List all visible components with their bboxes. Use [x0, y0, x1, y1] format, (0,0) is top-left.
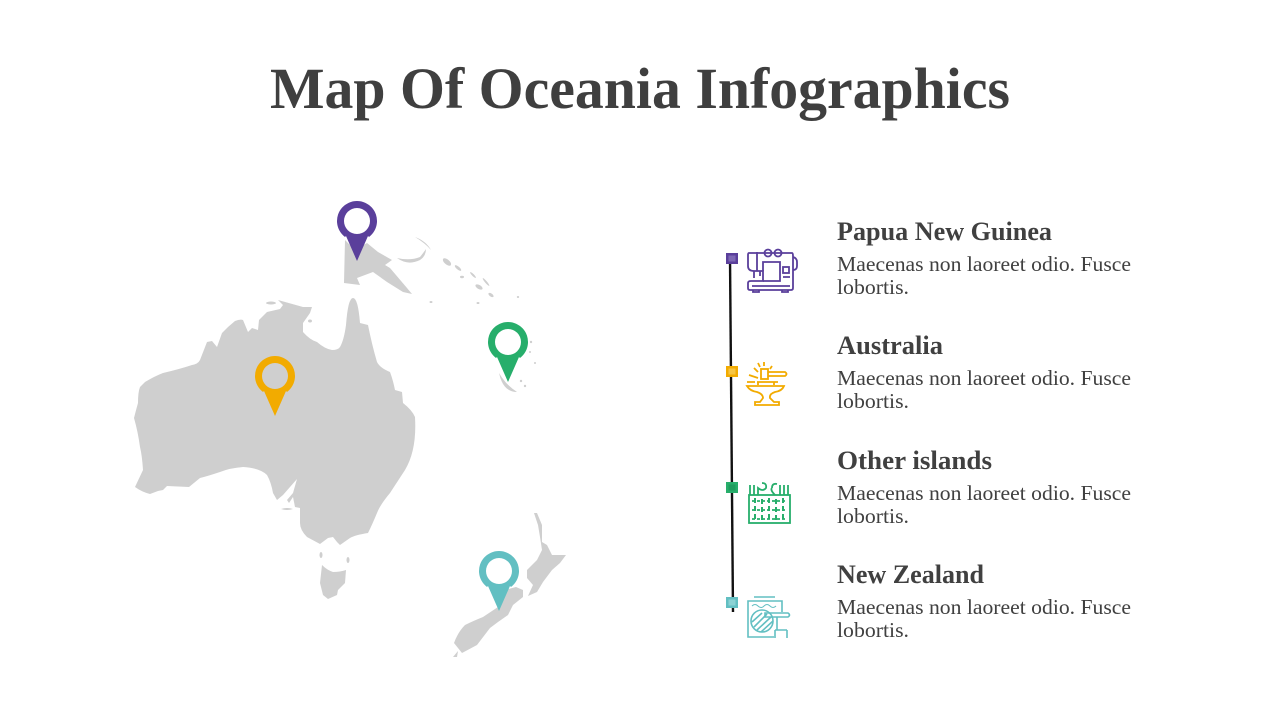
map: Solomon Islands and small islands [430, 257, 519, 304]
map: Kangaroo Island [281, 508, 293, 510]
description: Maecenas non laoreet odio. Fusce [837, 595, 1131, 619]
description: lobortis. [837, 504, 909, 528]
description: lobortis. [837, 275, 909, 299]
map: Tasmania [320, 565, 346, 599]
timeline marker: New Zealand [726, 597, 738, 608]
description: Maecenas non laoreet odio. Fusce [837, 252, 1131, 276]
heading: Australia [837, 331, 943, 360]
map: northern Australian islands [266, 302, 312, 322]
description: Maecenas non laoreet odio. Fusce [837, 481, 1131, 505]
item: Other islands [837, 446, 1131, 528]
timeline marker: Australia [726, 366, 738, 377]
pin: New Zealand [479, 551, 519, 611]
map of Oceania [134, 237, 566, 657]
title: Map Of Oceania Infographics [270, 56, 1010, 121]
description: Maecenas non laoreet odio. Fusce [837, 366, 1131, 390]
description [837, 366, 1131, 413]
timeline line [730, 258, 733, 612]
map: Bass Strait islands [320, 552, 350, 563]
description: lobortis. [837, 618, 909, 642]
item: Australia [837, 331, 1131, 413]
icon: anvil and hammer [747, 362, 786, 405]
icon: plantation field [749, 483, 790, 523]
map: New Zealand North Island [527, 513, 566, 596]
item: New Zealand [837, 560, 1131, 642]
description [837, 252, 1131, 299]
heading: Papua New Guinea [837, 217, 1052, 246]
description [837, 481, 1131, 528]
map: Stewart Island [453, 651, 458, 657]
heading: New Zealand [837, 560, 985, 589]
pin: Papua New Guinea [337, 201, 377, 261]
map: New Zealand South Island [454, 587, 523, 653]
map: New Caledonia and Vanuatu [499, 341, 536, 392]
map: New Britain and New Ireland [397, 237, 431, 263]
pin: Australia [255, 356, 295, 416]
timeline marker: Other islands [726, 482, 738, 493]
icon: sewing machine [748, 250, 797, 292]
description [837, 595, 1131, 642]
item: Papua New Guinea [837, 217, 1131, 299]
timeline marker: Papua New Guinea [726, 253, 738, 264]
pin: Other islands [488, 322, 528, 382]
map: Papua New Guinea [344, 240, 412, 294]
description: lobortis. [837, 389, 909, 413]
map: Australia [134, 298, 415, 545]
heading: Other islands [837, 446, 992, 475]
icon: hand drawing [748, 597, 790, 638]
